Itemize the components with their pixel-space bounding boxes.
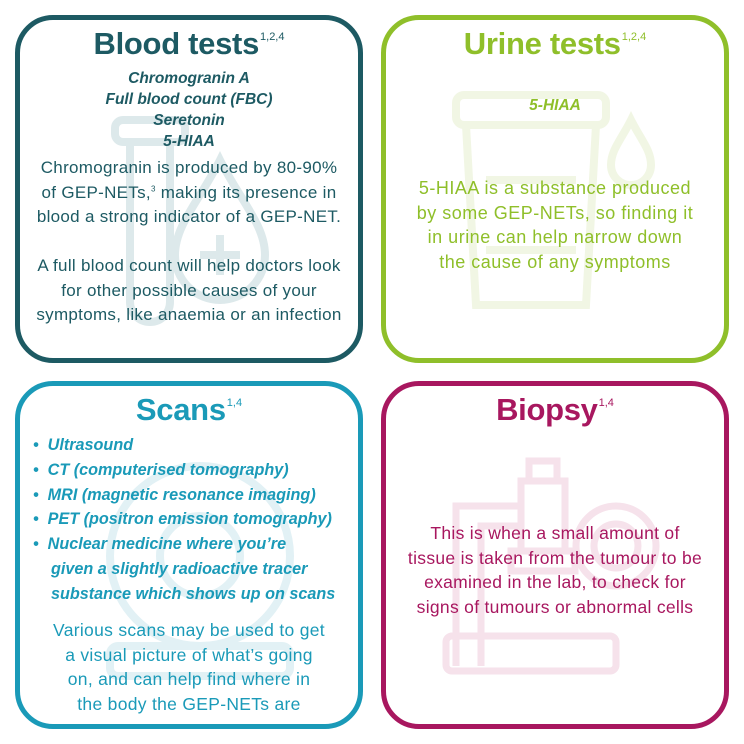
body text: tissue is taken from the tumour to be [408, 548, 702, 568]
body text: 5-HIAA is a substance produced [419, 178, 691, 198]
scan list: given a slightly radioactive tracer [51, 560, 307, 578]
test list: 5-HIAA [529, 97, 581, 114]
body text: blood a strong indicator of a GEP-NET. [37, 207, 341, 226]
scan list: • Ultrasound [33, 436, 133, 454]
icon: urine cup [452, 91, 655, 309]
icon: blood vial [111, 116, 269, 326]
test list: 5-HIAA [163, 133, 215, 150]
body text: Chromogranin is produced by 80-90% [41, 158, 337, 177]
body text [53, 620, 325, 714]
body text: on, and can help find where in [68, 669, 310, 689]
body text: a visual picture of what’s going [65, 644, 313, 664]
body text: symptoms, like anaemia or an infection [36, 305, 342, 324]
body text: by some GEP-NETs, so finding it [417, 202, 693, 222]
body text [417, 178, 693, 272]
body text: the cause of any symptoms [439, 252, 671, 272]
icon: scanner [106, 462, 294, 680]
scan list: • CT (computerised tomography) [33, 461, 289, 479]
scan list: • Nuclear medicine where you’re [33, 535, 286, 553]
body text: A full blood count will help doctors look [37, 256, 341, 275]
test list: Seretonin [153, 112, 225, 129]
test list [105, 70, 272, 150]
scan list: substance which shows up on scans [51, 585, 335, 603]
icon: microscope [442, 458, 660, 674]
body text: the body the GEP-NETs are [77, 694, 301, 714]
title: Blood tests1,2,4 [94, 26, 284, 61]
title: Biopsy1,4 [496, 392, 614, 427]
body text: This is when a small amount of [430, 523, 680, 543]
body text: in urine can help narrow down [428, 227, 682, 247]
body text [408, 523, 702, 616]
panel: blood tests [15, 15, 363, 363]
body text: examined in the lab, to check for [424, 572, 686, 592]
body text: Various scans may be used to get [53, 620, 325, 640]
title: Urine tests1,2,4 [464, 26, 646, 61]
scan list: • MRI (magnetic resonance imaging) [33, 486, 316, 504]
scan list [33, 436, 335, 603]
scan list: • PET (positron emission tomography) [33, 510, 332, 528]
test list: Chromogranin A [128, 70, 250, 87]
body text [36, 158, 342, 324]
body text: of GEP-NETs,3 making its presence in [42, 182, 336, 202]
test list: Full blood count (FBC) [105, 91, 272, 108]
panel: urine tests [381, 15, 729, 363]
body text: for other possible causes of your [61, 280, 317, 300]
title: Scans1,4 [136, 392, 242, 427]
body text: signs of tumours or abnormal cells [417, 596, 693, 616]
panel: scans [15, 381, 363, 729]
panel: biopsy [381, 381, 729, 729]
